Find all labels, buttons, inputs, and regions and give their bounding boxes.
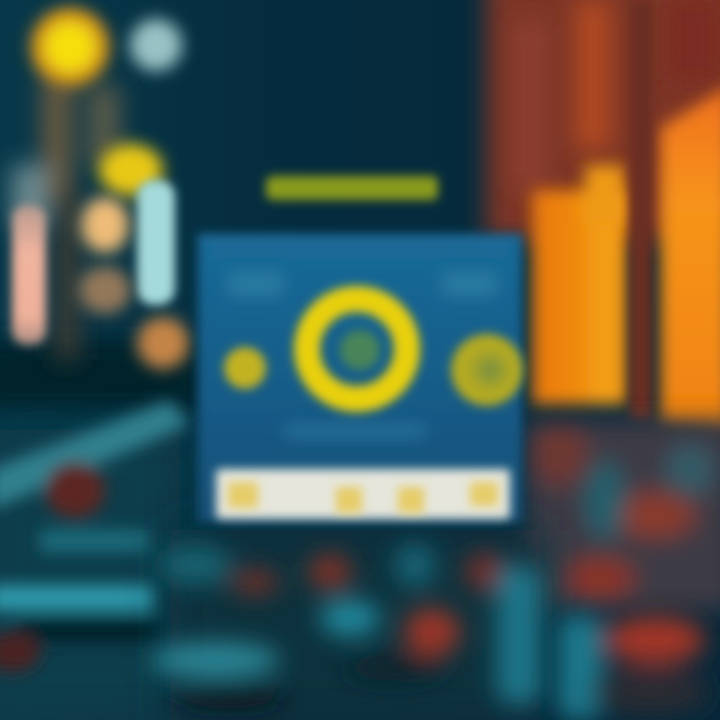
donut chart [307, 299, 407, 399]
right circle [451, 334, 523, 406]
card background [198, 234, 522, 522]
icon: pale blue circle [130, 19, 182, 71]
white bar [216, 469, 510, 519]
highlight top [585, 165, 625, 225]
orange block left [532, 190, 628, 405]
panel: left column chart [12, 7, 189, 369]
panel: left floor [0, 400, 190, 720]
panel: central blue card [198, 234, 523, 522]
small left circle [224, 347, 266, 389]
dark column [630, 0, 652, 420]
icon: yellow circle [30, 7, 110, 87]
panel: right floor [525, 420, 720, 610]
orange block right [660, 85, 720, 432]
peach blob [81, 197, 129, 253]
brown columns [12, 75, 120, 360]
card text haze [228, 272, 497, 436]
pink bar [12, 205, 46, 345]
panel: bottom floor [150, 530, 541, 720]
panel: right orange bars [486, 0, 720, 432]
title [266, 176, 438, 200]
tan blob [79, 266, 131, 314]
pale blue bar [137, 180, 175, 305]
icon: yellow small circle [99, 144, 163, 196]
red wall [486, 0, 720, 240]
left dark backdrop [0, 340, 200, 410]
orange blob [137, 317, 189, 369]
panel: bottom right blocks [558, 615, 710, 720]
wall streaks [515, 0, 720, 190]
